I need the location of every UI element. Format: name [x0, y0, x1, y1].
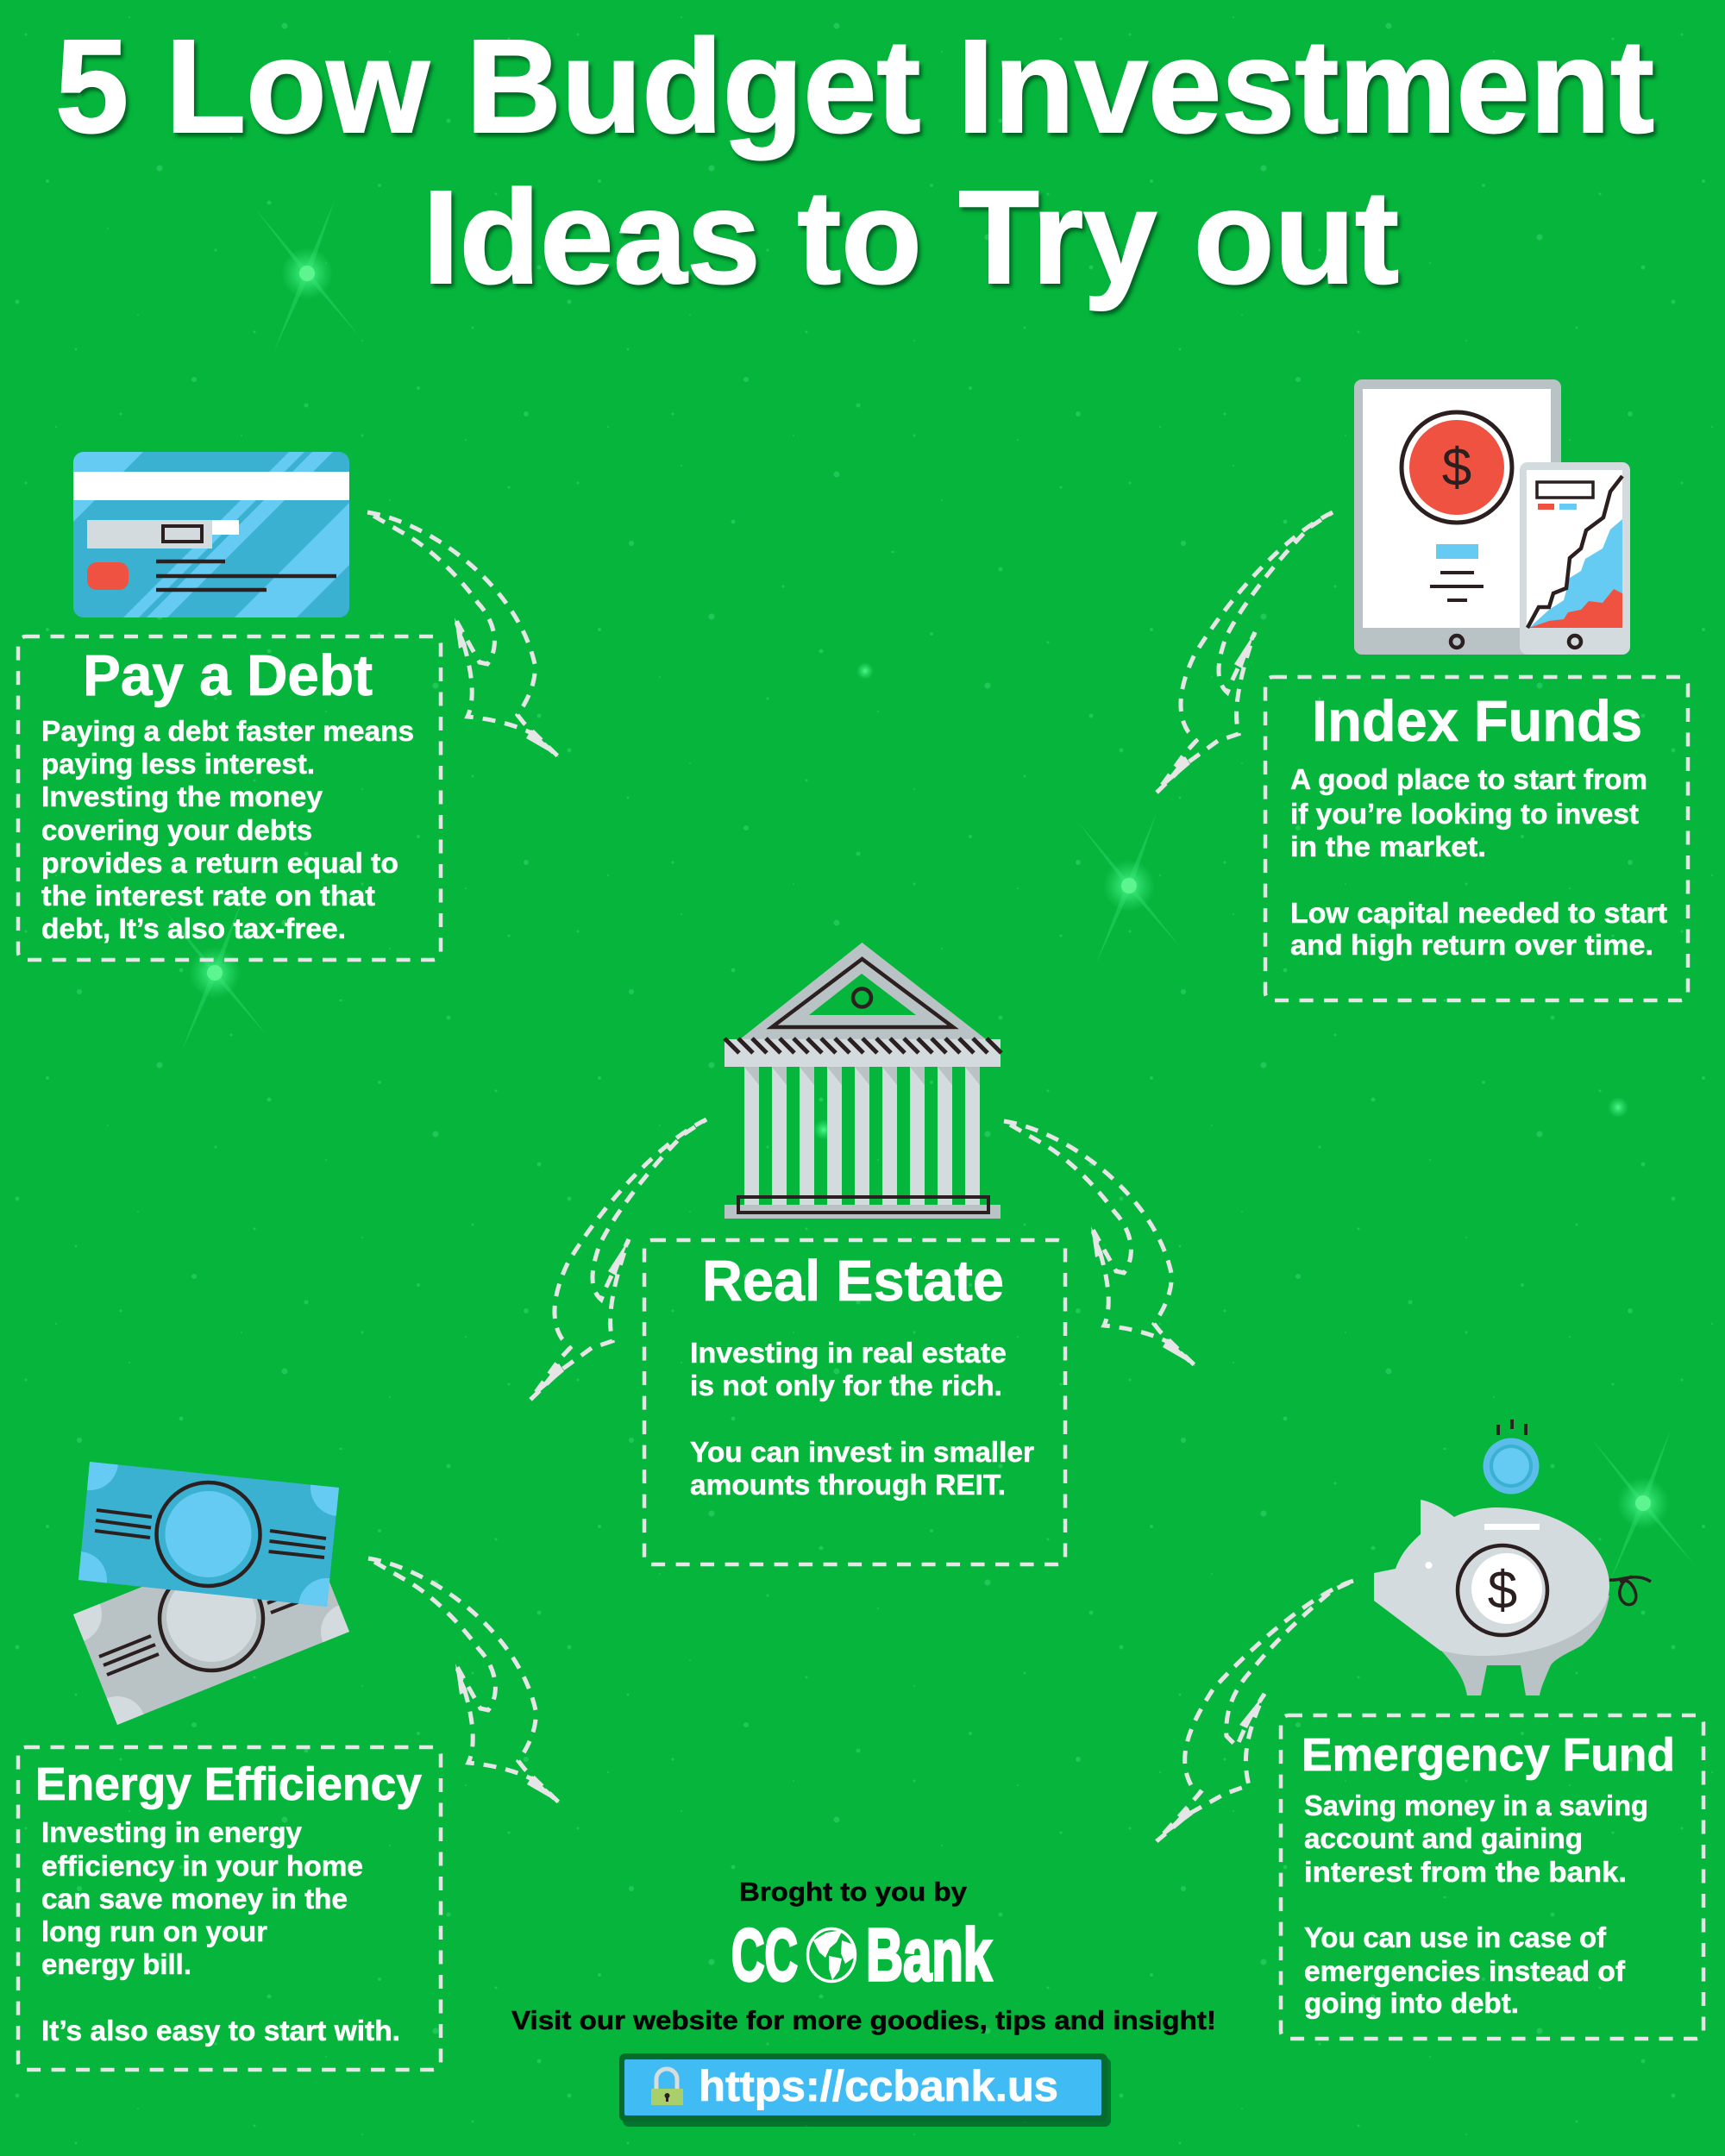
icon: globe	[807, 1928, 856, 1982]
heading: pay a debt: Pay a Debt	[83, 643, 373, 708]
text: emergency fund body: interest from the bank.	[1304, 1856, 1627, 1888]
text: emergency fund body: account and gaining	[1304, 1822, 1583, 1854]
text: real estate body: You can invest in smaller	[690, 1436, 1034, 1468]
text: pay a debt body: debt, It’s also tax-free.	[41, 912, 346, 944]
text: energy efficiency body	[41, 1816, 400, 2046]
text: visit our website: Visit our website for more goodies, tips and insight!	[511, 2005, 1216, 2035]
logo: CC Bank: Bank	[866, 1915, 993, 1996]
text: energy efficiency body: efficiency in your home	[41, 1850, 363, 1882]
text: pay a debt body: Investing the money	[41, 780, 323, 812]
text: energy efficiency body: long run on your	[41, 1915, 267, 1947]
icon: padlock	[651, 2069, 683, 2105]
text: index funds body: and high return over time.	[1290, 929, 1653, 961]
panel: energy efficiency	[18, 1747, 441, 2070]
text: energy efficiency body: can save money in the	[41, 1883, 348, 1915]
logo: CC Bank: CC	[731, 1915, 798, 1996]
text: energy efficiency body: energy bill.	[41, 1948, 191, 1980]
text: pay a debt body: provides a return equal to	[41, 847, 398, 879]
icon: falling coin	[1484, 1420, 1539, 1494]
text: emergency fund body: going into debt.	[1304, 1987, 1519, 2019]
text: energy efficiency body: It’s also easy to start with.	[41, 2015, 400, 2046]
text: index funds body: A good place to start from	[1290, 763, 1647, 795]
heading: index funds: Index Funds	[1312, 689, 1642, 754]
text: pay a debt body: paying less interest.	[41, 748, 315, 780]
text: index funds body: in the market.	[1290, 830, 1486, 862]
text: index funds body: if you’re looking to invest	[1290, 798, 1639, 830]
text: real estate body	[690, 1337, 1034, 1501]
arrow: pay a debt	[367, 512, 559, 757]
text: pay a debt body	[41, 715, 414, 944]
text: index funds body	[1290, 763, 1667, 961]
arrow: real estate left	[530, 1119, 706, 1400]
text: pay a debt body: Paying a debt faster means	[41, 715, 414, 747]
icon: credit card	[73, 452, 349, 617]
button: website link	[619, 2053, 1111, 2127]
text: emergency fund body: Saving money in a saving	[1304, 1789, 1648, 1821]
panel: index funds	[1265, 677, 1688, 1000]
text: emergency fund body	[1304, 1789, 1648, 2019]
arrow: emergency fund	[1157, 1581, 1353, 1841]
logo: CC Bank	[731, 1915, 993, 1996]
icon: banknotes	[73, 1462, 349, 1725]
text: real estate body: Investing in real estate	[690, 1337, 1007, 1369]
panel: pay a debt	[18, 636, 441, 960]
title: Ideas to Try out	[423, 163, 1399, 311]
arrow: energy efficiency	[368, 1558, 560, 1803]
arrow: index funds	[1157, 512, 1333, 793]
text: energy efficiency body: Investing in energy	[41, 1816, 303, 1848]
text: index funds body: Low capital needed to start	[1290, 897, 1667, 929]
title	[55, 12, 1654, 311]
icon: tablet and phone	[1354, 379, 1630, 655]
button: website link: https://ccbank.us	[699, 2062, 1058, 2110]
heading: real estate: Real Estate	[702, 1249, 1004, 1313]
text: emergency fund body: emergencies instead of	[1304, 1955, 1626, 1987]
icon: piggy bank: $	[1488, 1561, 1517, 1620]
icon: tablet and phone: $	[1442, 438, 1471, 498]
title: 5 Low Budget Investment	[55, 12, 1654, 160]
text: real estate body: amounts through REIT.	[690, 1469, 1006, 1501]
text: real estate body: is not only for the rich.	[690, 1369, 1002, 1401]
text: brought to you by: Broght to you by	[739, 1877, 968, 1907]
text: emergency fund body: You can use in case of	[1304, 1921, 1607, 1953]
text: pay a debt body: covering your debts	[41, 814, 312, 846]
heading: emergency fund: Emergency Fund	[1302, 1729, 1675, 1781]
panel: emergency fund	[1281, 1715, 1703, 2039]
icon: bank building	[724, 943, 1001, 1219]
panel: real estate	[644, 1240, 1065, 1564]
arrow: real estate right	[1004, 1121, 1195, 1366]
heading: energy efficiency: Energy Efficiency	[35, 1758, 422, 1810]
text: pay a debt body: the interest rate on that	[41, 880, 375, 912]
icon: piggy bank	[1374, 1420, 1651, 1695]
